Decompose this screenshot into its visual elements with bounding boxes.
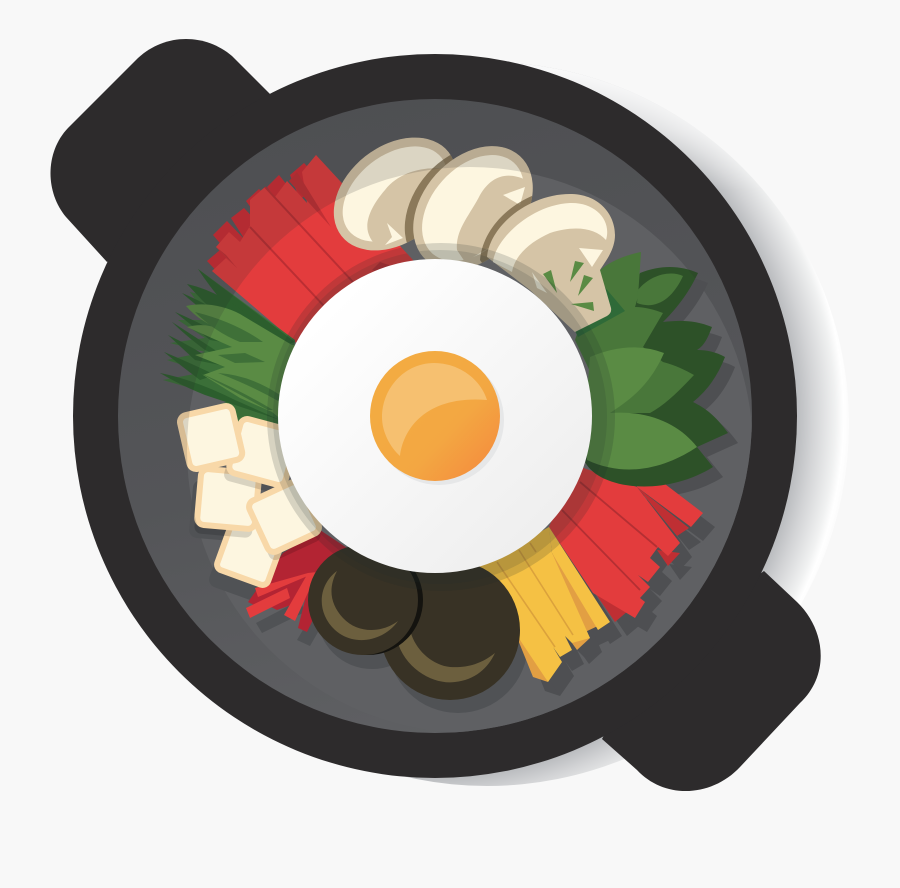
yolk highlight (382, 363, 487, 456)
tofu 5 (215, 517, 285, 587)
food: green chives (160, 269, 295, 425)
interior dark ring (118, 99, 752, 733)
red strip cast shadow (561, 479, 715, 636)
yolk (370, 351, 500, 481)
food cast shadows on pot (189, 277, 738, 713)
crimson base (248, 530, 350, 632)
bright small strips (246, 572, 317, 621)
stone pot body with handles (50, 39, 821, 791)
small top leaf (637, 274, 683, 305)
food: tofu cubes (179, 405, 323, 587)
dark under strips (593, 487, 689, 622)
mushroom 3 (480, 188, 615, 332)
food: button mushrooms (334, 138, 625, 337)
shading over food only (163, 138, 615, 584)
egg cast shadow outer (267, 243, 615, 591)
handle: bottom right (602, 571, 821, 791)
handle: top left (50, 39, 270, 262)
red strips front layer (212, 155, 435, 416)
all food ingredients (160, 114, 728, 700)
large shiitake highlight (397, 630, 495, 682)
egg cast shadow inner (273, 250, 607, 584)
food: small red strips bottom left (246, 530, 350, 632)
food: shiitake mushrooms (308, 545, 520, 700)
small shiitake highlight (322, 571, 398, 640)
orange under strips (510, 553, 600, 682)
white plate with pot shadow (125, 62, 849, 786)
yellow strip creases (497, 543, 573, 647)
food: red pepper strips top (207, 155, 435, 416)
food: spinach leaves right (575, 252, 728, 486)
fried egg (278, 259, 592, 573)
leaves dark back (580, 267, 728, 486)
mushroom 3 stem shadow on leaves (560, 272, 625, 337)
tofu shadows (189, 479, 281, 604)
shiitake shadows (317, 559, 528, 713)
strip creases (562, 482, 657, 590)
tofu 1 (179, 405, 244, 470)
pot interior (118, 99, 753, 733)
yellow strips (470, 527, 610, 682)
pot rim (73, 54, 797, 778)
yolk shadow (374, 355, 504, 485)
egg white (278, 259, 592, 573)
small shiitake (308, 545, 418, 655)
bright upper leaf (585, 347, 664, 420)
tofu 2 (223, 417, 298, 494)
leaves mid layer (575, 252, 694, 413)
interior crescent shade (163, 138, 530, 524)
small strip shadows (256, 600, 322, 646)
illustration: bibimbap in stone pot (50, 39, 836, 791)
mushroom 1 (312, 114, 478, 274)
chives mid spiky base (163, 269, 295, 425)
mushroom flecks (543, 261, 594, 311)
food: red pepper strips bottom right (549, 465, 703, 622)
food: yellow egg strips (470, 527, 610, 682)
chives dark blades (160, 269, 295, 420)
small shiitake cast shadow (313, 545, 423, 655)
tofu 3 (194, 469, 259, 538)
mushroom 2 (404, 146, 533, 265)
interior light area (187, 167, 753, 733)
yellow strip cast shadow (482, 541, 622, 696)
red strip creases (216, 172, 392, 306)
chives main blades (186, 304, 295, 420)
bright strips (549, 465, 703, 618)
leaf cast shadow (590, 277, 738, 496)
chives streaks (195, 312, 280, 410)
large shiitake (380, 560, 520, 700)
tofu 4 (247, 480, 323, 562)
bright lower leaf (585, 413, 697, 470)
red strips back layer (207, 163, 320, 280)
